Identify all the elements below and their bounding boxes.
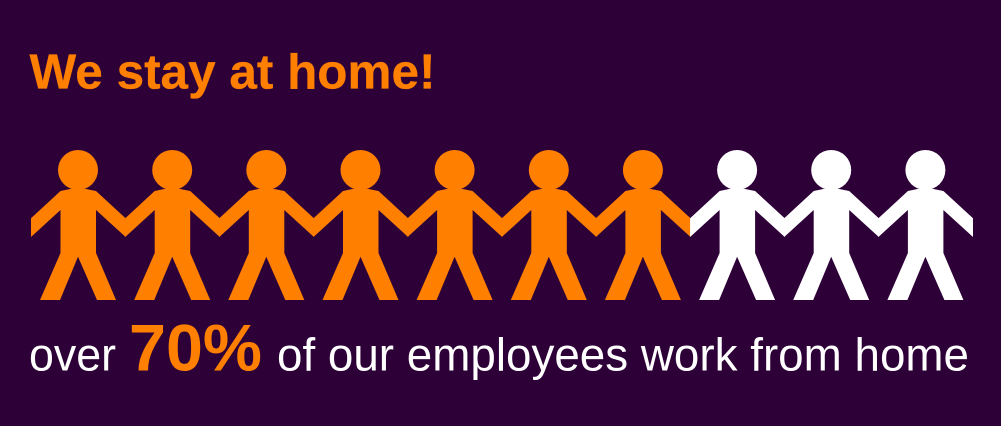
caption: over	[29, 328, 116, 380]
people chain: white figures	[690, 150, 973, 300]
caption	[29, 310, 969, 384]
caption remainder: of our employees work from home	[277, 328, 969, 380]
title: We stay at home!	[30, 46, 436, 100]
people chain: orange figures	[31, 150, 690, 300]
percentage: 70%	[129, 310, 262, 384]
